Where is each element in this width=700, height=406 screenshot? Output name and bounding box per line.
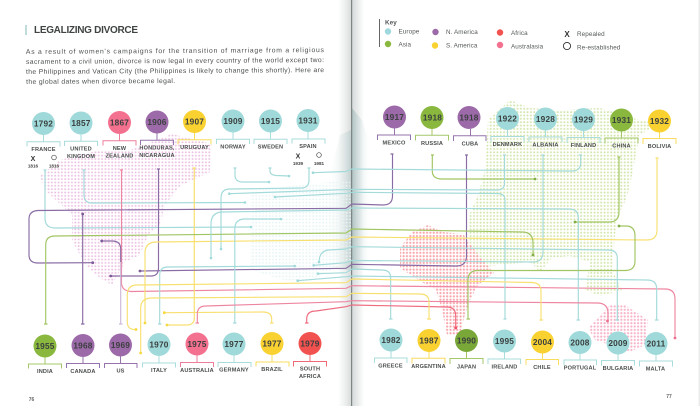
node: Chile 2004 bbox=[526, 330, 558, 371]
page number 77: 77 bbox=[666, 394, 672, 400]
bottom row right bbox=[374, 328, 672, 372]
node: Bulgaria 2009 bbox=[602, 332, 634, 372]
node: China 1931 bbox=[605, 108, 638, 150]
line: Finland bbox=[312, 155, 582, 174]
node: Mexico 1917 bbox=[378, 106, 410, 146]
intro text: the Philippines and Vatican City (the Philippines is likely to change this shortly). Here are bbox=[26, 67, 324, 76]
key: X bbox=[564, 30, 570, 39]
world map dots bbox=[40, 100, 660, 352]
line: Cuba bbox=[139, 155, 468, 272]
node: South Africa 1979: AFRICA bbox=[299, 374, 321, 380]
intro text: sacrament to a civil union, divorce is now legal in every country of the world except two: bbox=[26, 57, 324, 66]
node: Bulgaria 2009: 2009 bbox=[608, 338, 628, 348]
repealed and re-established dates: 1816 bbox=[49, 164, 60, 168]
node: Bulgaria 2009: BULGARIA bbox=[603, 366, 633, 372]
node: Sweden 1915: 1915 bbox=[261, 116, 280, 126]
node: Canada 1968: CANADA bbox=[70, 369, 96, 375]
key: Key bbox=[385, 20, 397, 26]
node: Russia 1918: 1918 bbox=[423, 112, 442, 122]
node: Mexico 1917: 1917 bbox=[385, 112, 404, 122]
line: Bolivia bbox=[144, 158, 659, 324]
node: Japan 1990: JAPAN bbox=[457, 364, 476, 370]
node: Norway 1909 bbox=[216, 110, 250, 150]
node: Greece 1982 bbox=[374, 328, 407, 370]
map: North America bbox=[40, 134, 212, 285]
intro text: the global dates when divorce became legal. bbox=[26, 78, 175, 86]
node: New Zealand 1867: ZEALAND bbox=[106, 154, 133, 160]
node: Honduras, Nicaragua 1906: HONDURAS, bbox=[139, 146, 175, 152]
line: Bulgaria bbox=[318, 247, 619, 320]
node: Honduras, Nicaragua 1906: NICARAGUA bbox=[139, 153, 175, 159]
line: Portugal bbox=[210, 208, 580, 320]
node: India 1955 bbox=[28, 334, 62, 375]
line: Argentina bbox=[139, 293, 431, 354]
line: Uruguay bbox=[166, 168, 196, 326]
line: Ireland bbox=[274, 192, 506, 319]
key: Re-established bbox=[577, 44, 621, 52]
node: Germany 1977: 1977 bbox=[224, 339, 244, 349]
key: S. America bbox=[446, 42, 478, 50]
node: Cuba 1918: CUBA bbox=[462, 142, 478, 148]
node: Argentina 1987: ARGENTINA bbox=[411, 364, 446, 370]
node: Albania 1928 bbox=[529, 108, 562, 148]
map: Australasia bbox=[588, 305, 648, 352]
key: Australasia bbox=[511, 44, 544, 50]
map: Europe faint bbox=[250, 180, 352, 285]
line: Russia bbox=[431, 155, 536, 180]
node: Finland 1929: FINLAND bbox=[571, 143, 596, 149]
node: Bolivia 1932: BOLIVIA bbox=[648, 144, 671, 150]
node: Norway 1909: 1909 bbox=[223, 116, 243, 126]
node: Malta 2011 bbox=[640, 332, 672, 372]
line: France bbox=[44, 170, 252, 228]
node: Malta 2011: 2011 bbox=[647, 338, 666, 348]
node: US 1969 bbox=[104, 334, 137, 374]
node: Australia 1975 bbox=[180, 332, 214, 374]
node: India 1955: 1955 bbox=[35, 341, 55, 351]
line: Greece bbox=[317, 269, 392, 319]
line: Japan bbox=[466, 225, 635, 319]
node: China 1931: 1931 bbox=[612, 115, 631, 125]
line: Germany bbox=[233, 218, 282, 323]
node: United Kingdom 1857: UNITED bbox=[70, 146, 92, 152]
line: Chile bbox=[127, 279, 543, 331]
top row left bbox=[27, 109, 325, 168]
node: Germany 1977 bbox=[218, 332, 251, 374]
node: Denmark 1922 bbox=[491, 107, 524, 148]
line: US bbox=[100, 240, 122, 324]
bottom row left bbox=[28, 332, 326, 380]
node: Mexico 1917: MEXICO bbox=[383, 140, 406, 146]
node: Italy 1970 bbox=[142, 333, 176, 374]
node: Brazil 1977: 1977 bbox=[262, 338, 282, 348]
node: Brazil 1977: BRAZIL bbox=[261, 367, 283, 373]
node: New Zealand 1867: NEW bbox=[113, 146, 127, 152]
node: Uruguay 1907: URUGUAY bbox=[180, 145, 209, 151]
title: LEGALIZING DIVORCE bbox=[34, 25, 138, 36]
line: Mexico bbox=[29, 154, 394, 264]
line: Norway bbox=[234, 168, 270, 183]
line: Denmark bbox=[228, 155, 506, 195]
node: Russia 1918: RUSSIA bbox=[421, 141, 443, 147]
node: Argentina 1987: 1987 bbox=[419, 336, 439, 346]
node: United Kingdom 1857: 1857 bbox=[71, 118, 91, 128]
node: US 1969: US bbox=[116, 368, 125, 374]
node: United Kingdom 1857: KINGDOM bbox=[67, 154, 95, 160]
node: Finland 1929: 1929 bbox=[574, 114, 593, 124]
repealed and re-established dates: 1816 bbox=[28, 164, 39, 168]
node: Canada 1968: 1968 bbox=[73, 340, 93, 350]
repealed and re-established dates bbox=[293, 153, 325, 166]
node: Argentina 1987 bbox=[411, 329, 446, 370]
line: South Africa bbox=[305, 305, 457, 329]
key: Europe bbox=[398, 28, 420, 36]
node: Honduras, Nicaragua 1906: 1906 bbox=[147, 117, 167, 127]
node: Japan 1990: 1990 bbox=[457, 336, 476, 346]
repealed and re-established dates: 1981 bbox=[314, 161, 325, 166]
node: South Africa 1979 bbox=[294, 332, 326, 380]
map: Africa bbox=[400, 225, 494, 335]
repealed and re-established dates: 1939 bbox=[293, 161, 304, 166]
node: Russia 1918 bbox=[416, 106, 448, 147]
node: Uruguay 1907 bbox=[178, 110, 211, 151]
node: Chile 2004: 2004 bbox=[533, 337, 552, 347]
node: Albania 1928: 1928 bbox=[536, 114, 555, 124]
node: Spain 1931: 1931 bbox=[298, 116, 318, 126]
node: Finland 1929 bbox=[567, 108, 600, 149]
node: Denmark 1922: 1922 bbox=[498, 114, 517, 124]
node: South Africa 1979: SOUTH bbox=[300, 366, 320, 372]
node: Honduras, Nicaragua 1906 bbox=[139, 110, 175, 159]
line: Canada bbox=[81, 213, 84, 324]
connector lines bbox=[29, 154, 676, 354]
key: Repealed bbox=[577, 31, 605, 38]
node: Australia 1975: AUSTRALIA bbox=[180, 368, 214, 374]
node: Italy 1970: 1970 bbox=[149, 340, 169, 350]
node: Bolivia 1932 bbox=[643, 110, 676, 150]
line: Italy bbox=[158, 265, 296, 324]
top row right bbox=[378, 106, 676, 150]
key: Africa bbox=[511, 30, 528, 37]
node: Canada 1968 bbox=[66, 334, 100, 375]
node: Portugal 2008 bbox=[564, 331, 597, 372]
node: France 1792: 1792 bbox=[34, 118, 53, 128]
node: Albania 1928: ALBANIA bbox=[532, 142, 559, 148]
node: Cuba 1918: 1918 bbox=[459, 112, 479, 122]
page number 76: 76 bbox=[29, 397, 34, 403]
node: Chile 2004: CHILE bbox=[533, 365, 551, 371]
line: China bbox=[574, 157, 620, 223]
line: Australia bbox=[196, 301, 609, 323]
node: Denmark 1922: DENMARK bbox=[493, 142, 522, 148]
node: New Zealand 1867: 1867 bbox=[110, 118, 129, 128]
key: N. America bbox=[446, 29, 478, 36]
node: Italy 1970: ITALY bbox=[151, 368, 167, 374]
node: Germany 1977: GERMANY bbox=[219, 368, 249, 374]
key bbox=[379, 19, 621, 52]
map: Asia bbox=[468, 100, 660, 296]
node: Ireland 1995: 1995 bbox=[495, 336, 514, 346]
repealed and re-established dates: X bbox=[296, 154, 301, 160]
node: Brazil 1977 bbox=[256, 332, 289, 373]
node: Norway 1909: NORWAY bbox=[220, 144, 246, 150]
node: Uruguay 1907: 1907 bbox=[185, 116, 204, 126]
node: Bolivia 1932: 1932 bbox=[650, 116, 669, 126]
intro text: As a result of women's campaigns for the transition of marriage from a religious bbox=[26, 47, 325, 56]
repealed and re-established dates: X bbox=[31, 156, 36, 163]
node: India 1955: INDIA bbox=[37, 369, 53, 375]
line: Malta bbox=[296, 276, 658, 320]
node: Greece 1982: GREECE bbox=[378, 364, 403, 370]
repealed and re-established dates bbox=[28, 155, 60, 168]
node: Malta 2011: MALTA bbox=[646, 366, 665, 372]
node: Japan 1990 bbox=[450, 329, 483, 370]
node: Sweden 1915 bbox=[254, 110, 287, 150]
line: Brazil bbox=[163, 311, 274, 323]
line: India bbox=[44, 229, 534, 324]
node: China 1931: CHINA bbox=[612, 144, 631, 150]
node: Greece 1982: 1982 bbox=[381, 335, 401, 345]
node: South Africa 1979: 1979 bbox=[300, 338, 320, 348]
line: United Kingdom bbox=[82, 170, 246, 204]
node: Ireland 1995: IRELAND bbox=[492, 364, 517, 370]
node: France 1792 bbox=[27, 112, 60, 168]
node: United Kingdom 1857 bbox=[64, 112, 98, 160]
node: Portugal 2008: PORTUGAL bbox=[564, 366, 597, 372]
node: Spain 1931: SPAIN bbox=[299, 144, 317, 150]
node: Sweden 1915: SWEDEN bbox=[258, 144, 283, 150]
node: Australia 1975: 1975 bbox=[187, 339, 207, 349]
node: US 1969: 1969 bbox=[111, 340, 130, 350]
node: Spain 1931 bbox=[292, 109, 325, 166]
node: Cuba 1918 bbox=[454, 106, 486, 148]
line: New Zealand bbox=[120, 170, 676, 339]
line: Albania bbox=[312, 155, 544, 267]
node: Portugal 2008: 2008 bbox=[570, 338, 590, 348]
line: Spain bbox=[220, 168, 310, 250]
intro text bbox=[26, 47, 325, 86]
key: Asia bbox=[398, 42, 412, 48]
node: New Zealand 1867 bbox=[103, 111, 136, 160]
line: Sweden bbox=[268, 168, 290, 177]
line: Honduras, Nicaragua bbox=[109, 169, 160, 277]
node: France 1792: FRANCE bbox=[31, 147, 56, 153]
node: Ireland 1995 bbox=[488, 330, 520, 370]
